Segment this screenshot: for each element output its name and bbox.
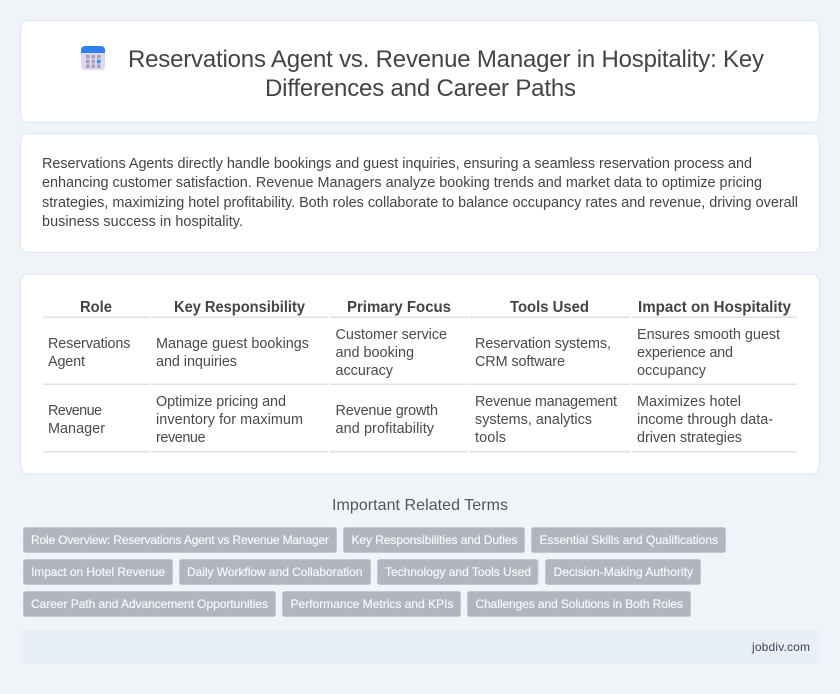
tag: performance metrics bbox=[282, 592, 460, 616]
text block: introduction: strategies, maximizing hotel profitability. Both roles collaborate to balance occupancy rates and revenue, driving overall bbox=[42, 195, 798, 211]
table row: Reservations Agent: and inquiries bbox=[156, 354, 237, 370]
table row: Reservations Agent: CRM software bbox=[475, 354, 565, 370]
tag: decision-making bbox=[546, 560, 700, 584]
table row: Reservations Agent: occupancy bbox=[637, 363, 707, 379]
tag: technology bbox=[378, 560, 538, 584]
table header row: Role bbox=[80, 299, 112, 316]
table row: Revenue Manager: Revenue bbox=[48, 403, 102, 419]
text block: introduction: Reservations Agents directly handle bookings and guest inquiries, ensuring a seamless reservation process and bbox=[42, 156, 752, 172]
table row: Revenue Manager: Maximizes hotel bbox=[637, 394, 741, 410]
tag: daily workflow: Daily Workflow and Collaboration bbox=[187, 565, 362, 579]
table row: Revenue Manager: driven strategies bbox=[637, 430, 742, 446]
tag: career path bbox=[24, 592, 276, 616]
tag: career path: Career Path and Advancement Opportunities bbox=[31, 597, 268, 611]
footer: jobdiv.com bbox=[751, 640, 810, 654]
tag: performance metrics: Performance Metrics and KPIs bbox=[290, 597, 454, 611]
table header row: Key Responsibility bbox=[174, 299, 305, 316]
tag: technology: Technology and Tools Used bbox=[385, 565, 531, 579]
table row: Revenue Manager: Manager bbox=[48, 421, 105, 437]
table row: Reservations Agent: accuracy bbox=[336, 363, 394, 379]
tag: challenges bbox=[468, 592, 690, 616]
tag: key responsibilities bbox=[344, 528, 524, 552]
tag: decision-making: Decision-Making Authority bbox=[554, 565, 693, 579]
panel: comparison table bbox=[20, 274, 820, 474]
tag: daily workflow bbox=[180, 560, 370, 584]
table header row: Tools Used bbox=[510, 299, 589, 316]
table row: Reservations Agent: Reservations bbox=[48, 336, 130, 352]
tag: essential skills: Essential Skills and Qualifications bbox=[540, 533, 718, 547]
table row: Revenue Manager: Revenue management bbox=[475, 394, 617, 410]
table row: Reservations Agent: Reservation systems, bbox=[475, 336, 611, 352]
table header row: Primary Focus bbox=[347, 299, 451, 316]
text block: introduction: enhancing customer satisfaction. Revenue Managers analyze booking trends and market data to optimize pricing bbox=[42, 175, 762, 191]
tag: challenges: Challenges and Solutions in Both Roles bbox=[476, 597, 683, 611]
tag: hotel revenue bbox=[24, 560, 172, 584]
tag: essential skills bbox=[532, 528, 726, 552]
related term tags bbox=[24, 528, 726, 616]
table row: Reservations Agent: Ensures smooth guest bbox=[637, 327, 780, 343]
table row: Reservations Agent: Agent bbox=[48, 354, 85, 370]
table row: Revenue Manager: Optimize pricing and bbox=[156, 394, 286, 410]
table row: Reservations Agent: Customer service bbox=[336, 327, 447, 343]
table row: Revenue Manager: tools bbox=[475, 430, 506, 446]
table row: Reservations Agent: experience and bbox=[637, 345, 733, 361]
table row: Revenue Manager: systems, analytics bbox=[475, 412, 592, 428]
text block: introduction: business success in hospitality. bbox=[42, 214, 243, 230]
title: Reservations Agent vs. Revenue Manager in Hospitality: Key bbox=[128, 46, 764, 73]
heading: related terms: Important Related Terms bbox=[332, 497, 508, 514]
table header row bbox=[80, 299, 791, 316]
footer bbox=[20, 630, 820, 664]
table row: Reservations Agent: Manage guest bookings bbox=[156, 336, 309, 352]
title bbox=[128, 46, 764, 102]
table row: Revenue Manager: Revenue growth bbox=[336, 403, 438, 419]
table row: Reservations Agent: and booking bbox=[336, 345, 414, 361]
table row: Revenue Manager: and profitability bbox=[336, 421, 435, 437]
title: Differences and Career Paths bbox=[265, 75, 576, 102]
tag: role overview: Role Overview: Reservations Agent vs Revenue Manager bbox=[31, 533, 329, 547]
tag: hotel revenue: Impact on Hotel Revenue bbox=[31, 565, 165, 579]
icon: calendar bbox=[81, 46, 105, 70]
tag: role overview bbox=[24, 528, 336, 552]
table header row: Impact on Hospitality bbox=[638, 299, 791, 316]
table row: Revenue Manager: revenue bbox=[156, 430, 206, 446]
table row: Reservations Agent bbox=[48, 327, 780, 379]
panel: header bbox=[20, 20, 820, 122]
table row: Revenue Manager bbox=[48, 394, 773, 446]
panel: introduction bbox=[20, 134, 820, 252]
tag: key responsibilities: Key Responsibilities and Duties bbox=[352, 533, 518, 547]
text block: introduction bbox=[42, 156, 798, 230]
table row: Revenue Manager: inventory for maximum bbox=[156, 412, 303, 428]
table row: Revenue Manager: income through data- bbox=[637, 412, 773, 428]
